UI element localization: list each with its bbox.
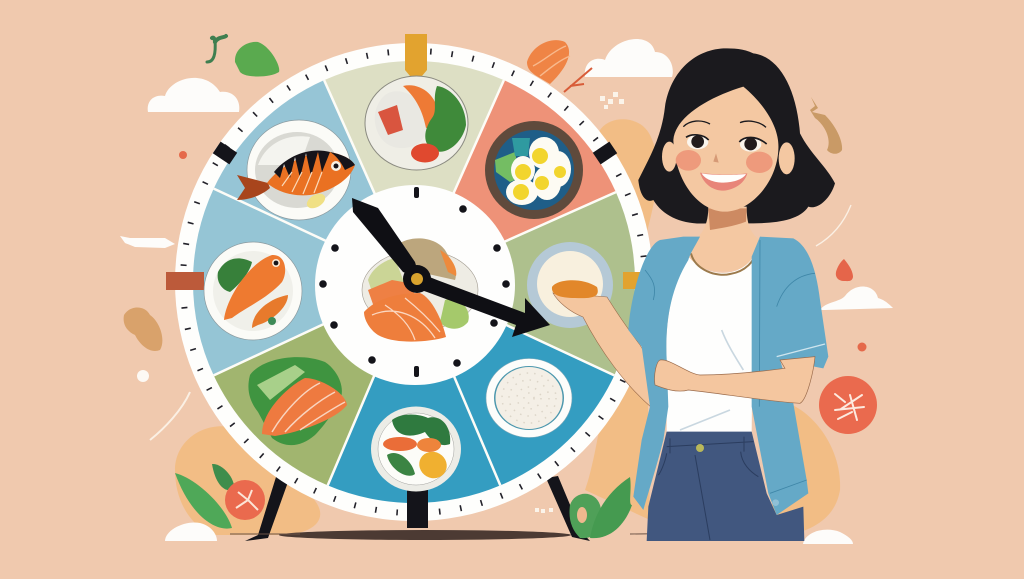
lettuce and salmon slice (248, 357, 347, 445)
woman: neck shadow (708, 208, 747, 230)
hub centre (411, 273, 423, 285)
woman: eyebrows (683, 121, 766, 127)
sector: top (324, 61, 504, 282)
woman: neck and chest (688, 207, 760, 271)
icon: root right (810, 97, 842, 154)
plate: vegetables (371, 406, 461, 492)
right bottom leaves (569, 477, 632, 538)
marker: right gold tab (623, 272, 643, 289)
woman (552, 48, 835, 541)
woman: cardigan left (628, 237, 700, 510)
woman: cardigan seams (645, 240, 815, 493)
sector: right green (414, 192, 635, 375)
white speckles near leaves (535, 508, 553, 513)
food held in hand (552, 280, 598, 298)
woman: extended arm and hand (553, 293, 665, 408)
plate: orange fish (204, 242, 302, 340)
plate: top vegetables and salmon (365, 76, 468, 170)
clock dial (315, 185, 515, 385)
center salmon dish (362, 238, 478, 342)
hub (403, 265, 431, 293)
marker: black tab left (213, 142, 237, 164)
small accents: dots (137, 151, 866, 440)
sector: left blue (193, 189, 414, 375)
woman: face (673, 87, 778, 212)
woman: back hair (638, 48, 835, 224)
plate: striped fish (237, 120, 355, 220)
sector: lower right blue (414, 282, 614, 485)
marker: black tab right (593, 142, 617, 164)
icon: red drop (836, 259, 853, 281)
rim tick marks (167, 35, 661, 529)
stand legs and ground shadow (230, 476, 800, 541)
woman: cardigan sleeve hem (777, 344, 825, 357)
icon: salmon fillet (527, 40, 592, 92)
woman: crossed arm (655, 357, 815, 403)
bowl: eggs and greens (485, 121, 583, 219)
sector: salmon (414, 80, 616, 282)
sector: lower left olive (214, 282, 414, 485)
clock hands (352, 198, 550, 337)
sector dividers (214, 80, 616, 485)
woman: cardigan right (752, 237, 828, 515)
woman: smile (700, 173, 747, 191)
icon: green leafy blob (235, 42, 279, 76)
woman: jeans belt and seams (658, 437, 758, 540)
woman: blush (676, 150, 773, 173)
clouds (120, 39, 893, 544)
woman: jeans button (696, 444, 704, 452)
stand centre post (407, 490, 428, 528)
wheel rim (175, 43, 653, 521)
icon: red circle with white sprig (819, 376, 877, 434)
hour hand (352, 198, 420, 279)
fish (237, 151, 355, 200)
sector: bottom blue (328, 282, 500, 503)
marker: left red tab (166, 272, 204, 290)
woman: nose (713, 153, 719, 163)
woman: ears (662, 142, 795, 174)
left bottom leaves and red mushroom (175, 464, 265, 529)
white speckles (600, 92, 624, 109)
plate: cream dish (527, 242, 613, 328)
woman: cardigan pocket button (772, 499, 779, 506)
background blobs (175, 119, 840, 535)
icon: sprout (207, 36, 226, 62)
bowl: rice (486, 358, 572, 438)
woman: necklace (691, 248, 757, 275)
woman: eyes (686, 135, 767, 152)
sector: upper left (214, 80, 414, 282)
woman: jeans (647, 432, 804, 541)
woman: white shirt (666, 257, 753, 433)
woman: shirt folds (680, 330, 743, 430)
marker: top gold tab (405, 34, 427, 76)
icon: root left (124, 308, 162, 351)
dial hour marks (319, 187, 510, 377)
clock wheel (167, 35, 661, 529)
minute hand with arrow head (415, 272, 550, 337)
